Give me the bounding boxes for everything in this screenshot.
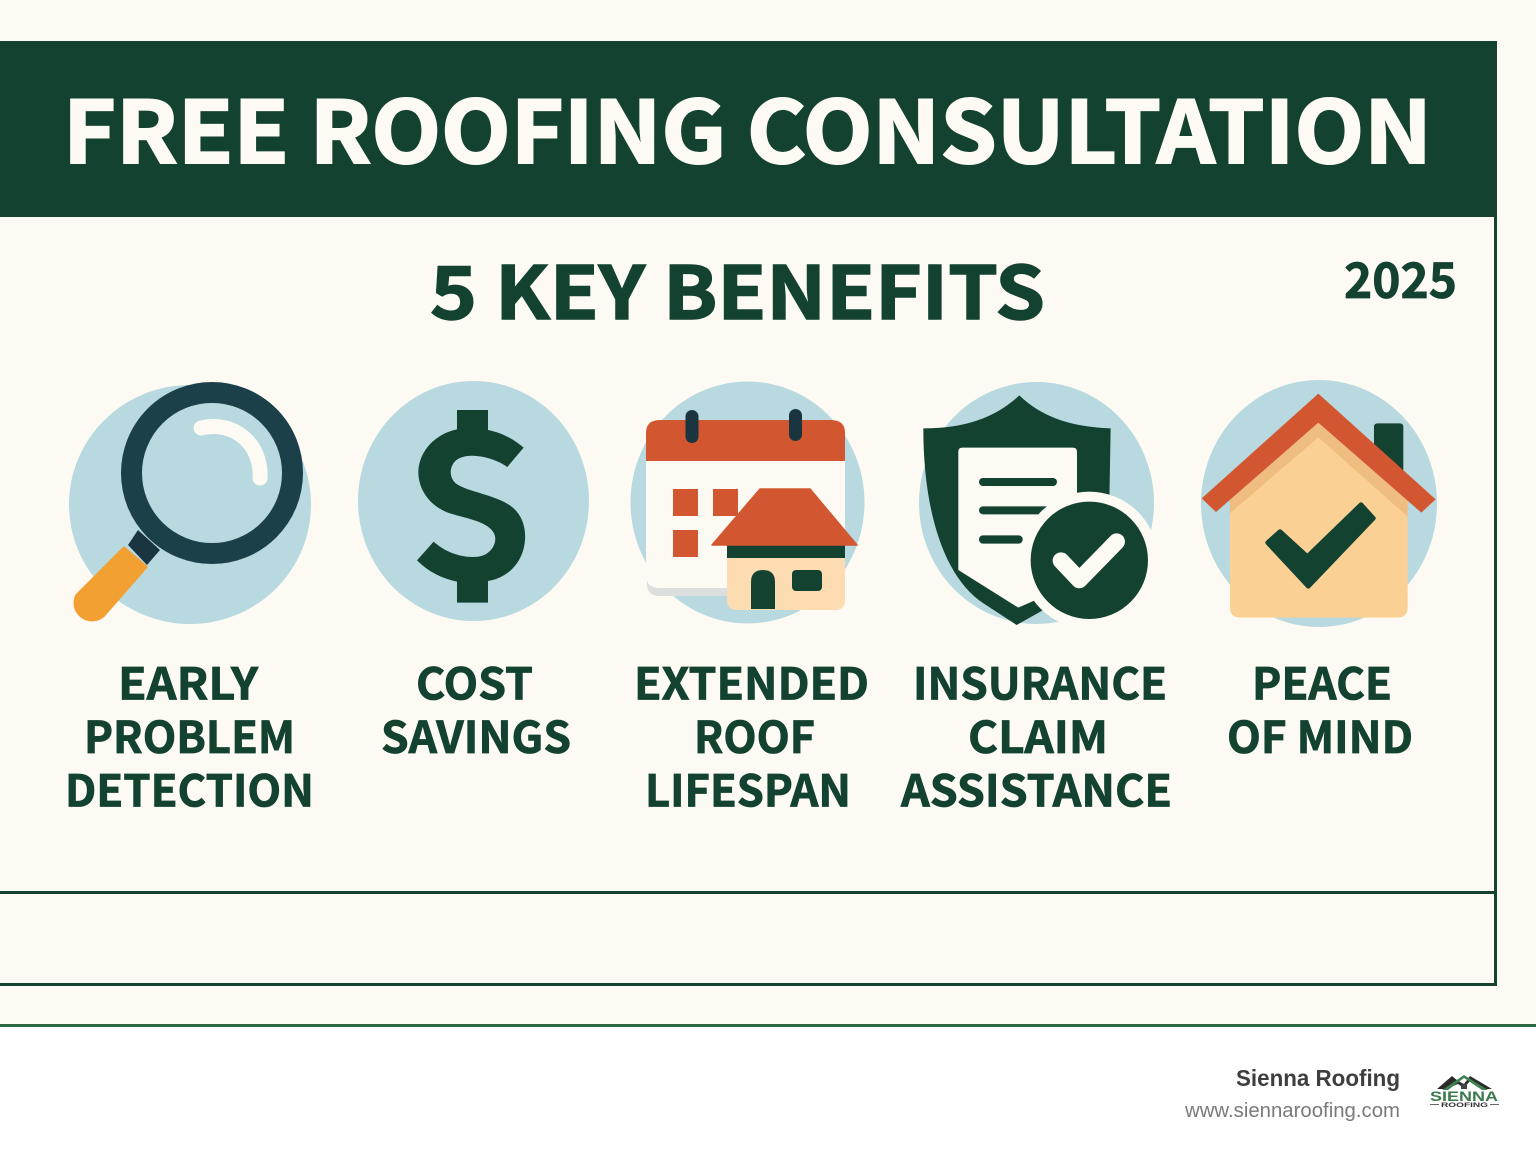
panel: main frame: [0, 41, 1497, 986]
icon: dollar sign: [358, 381, 589, 621]
label: peace of mind: OF MIND: [1227, 702, 1413, 766]
label: early problem detection: [65, 648, 314, 820]
label: cost savings: SAVINGS: [381, 702, 571, 766]
label: extended roof lifespan: [634, 648, 869, 820]
label: early problem detection: PROBLEM: [84, 702, 295, 766]
icon: shield with document and check: [919, 382, 1158, 629]
year label: 2025: [1344, 242, 1457, 313]
title banner: [0, 41, 1497, 217]
label: extended roof lifespan: ROOF: [694, 702, 815, 766]
label: peace of mind: [1227, 648, 1413, 766]
title banner: FREE ROOFING CONSULTATION: [63, 63, 1432, 188]
logo: Sienna Roofing: [1430, 1075, 1499, 1109]
icon: house with check: [1201, 380, 1437, 627]
label: insurance claim assistance: INSURANCE: [913, 648, 1167, 712]
label: early problem detection: DETECTION: [65, 756, 314, 820]
icon: magnifying glass: [69, 385, 311, 624]
footer website: www.siennaroofing.com: [1184, 1100, 1400, 1122]
label: peace of mind: PEACE: [1252, 648, 1392, 712]
label: insurance claim assistance: ASSISTANCE: [900, 756, 1172, 820]
icon: calendar with house: [630, 382, 864, 624]
label: cost savings: [381, 648, 571, 766]
footer: [0, 1024, 1536, 1154]
label: cost savings: COST: [416, 648, 533, 712]
label: insurance claim assistance: [900, 648, 1172, 820]
footer brand name: Sienna Roofing: [1236, 1065, 1400, 1091]
label: extended roof lifespan: LIFESPAN: [645, 756, 851, 820]
label: early problem detection: EARLY: [118, 648, 259, 712]
label: insurance claim assistance: CLAIM: [968, 702, 1108, 766]
logo: Sienna Roofing: SIENNA: [1430, 1088, 1498, 1104]
label: extended roof lifespan: EXTENDED: [634, 648, 869, 712]
subtitle: 5 key benefits: 5 KEY BENEFITS: [430, 235, 1045, 341]
logo: Sienna Roofing: ROOFING: [1441, 1103, 1489, 1109]
